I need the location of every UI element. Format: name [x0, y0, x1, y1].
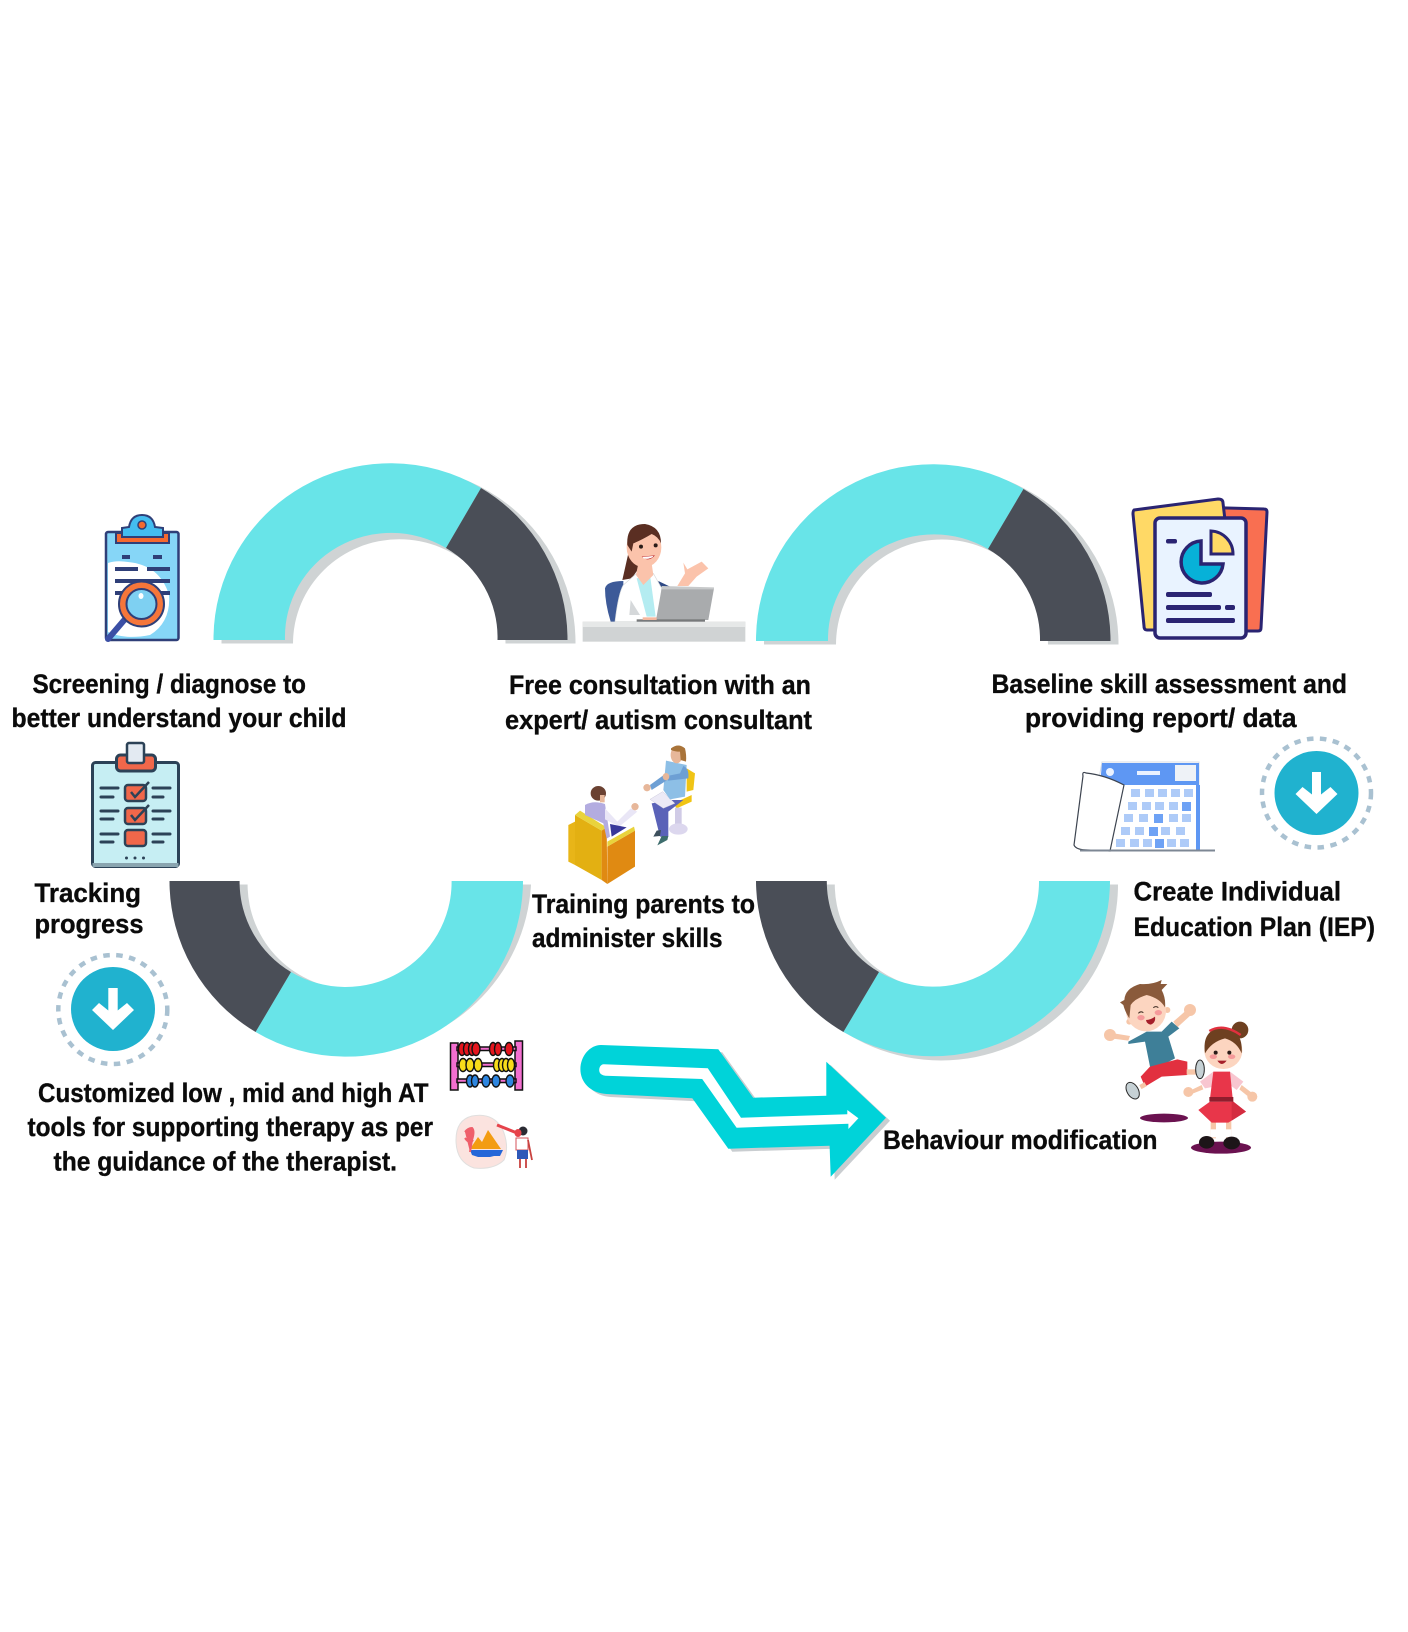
icon: down arrow circle left	[58, 955, 167, 1064]
heading: training parents: administer skills	[532, 923, 722, 953]
heading: tracking progress: Tracking	[34, 878, 141, 908]
icon: happy children jumping	[1104, 980, 1257, 1154]
heading: training parents: Training parents to	[532, 889, 755, 919]
arrow: zigzag to behaviour modification	[580, 1045, 890, 1180]
heading: free consultation: Free consultation with an	[509, 670, 811, 700]
icon: parent and consultant meeting	[568, 745, 695, 884]
icon: report documents with pie chart	[1133, 499, 1267, 638]
icon: clipboard with magnifier	[106, 515, 178, 640]
heading: customized tools	[28, 1078, 433, 1176]
heading: baseline assessment: Baseline skill assessment and	[992, 669, 1347, 699]
heading: free consultation	[505, 670, 812, 735]
heading: tracking progress	[34, 878, 144, 939]
arc: bottom right	[756, 881, 1118, 1060]
heading: screening: Screening / diagnose to	[32, 669, 306, 699]
heading: free consultation: expert/ autism consultant	[505, 705, 812, 735]
heading: tracking progress: progress	[34, 909, 144, 939]
heading: baseline assessment	[992, 669, 1347, 733]
heading: customized tools: tools for supporting therapy as per	[28, 1112, 433, 1142]
heading: create IEP	[1134, 876, 1375, 942]
icon: child pointing at flamingo picture	[456, 1115, 532, 1168]
heading: customized tools: the guidance of the therapist.	[54, 1146, 397, 1176]
heading: behaviour modification: Behaviour modification	[883, 1125, 1158, 1155]
heading: training parents	[532, 889, 755, 953]
arc: top left	[213, 463, 576, 644]
heading: create IEP: Education Plan (IEP)	[1134, 912, 1375, 942]
icon: abacus	[450, 1041, 522, 1090]
icon: down arrow circle right	[1262, 738, 1371, 848]
heading: baseline assessment: providing report/ data	[1025, 703, 1297, 733]
heading: create IEP: Create Individual	[1134, 876, 1341, 906]
icon: checklist clipboard	[92, 743, 178, 867]
icon: calendar	[1074, 762, 1215, 852]
heading: customized tools: Customized low , mid and high AT	[38, 1078, 428, 1108]
icon: doctor at desk with laptop	[583, 524, 745, 642]
heading: screening: better understand your child	[12, 703, 346, 733]
heading: screening	[12, 669, 346, 733]
arc: top right	[756, 464, 1119, 644]
arc: bottom left	[170, 881, 531, 1057]
